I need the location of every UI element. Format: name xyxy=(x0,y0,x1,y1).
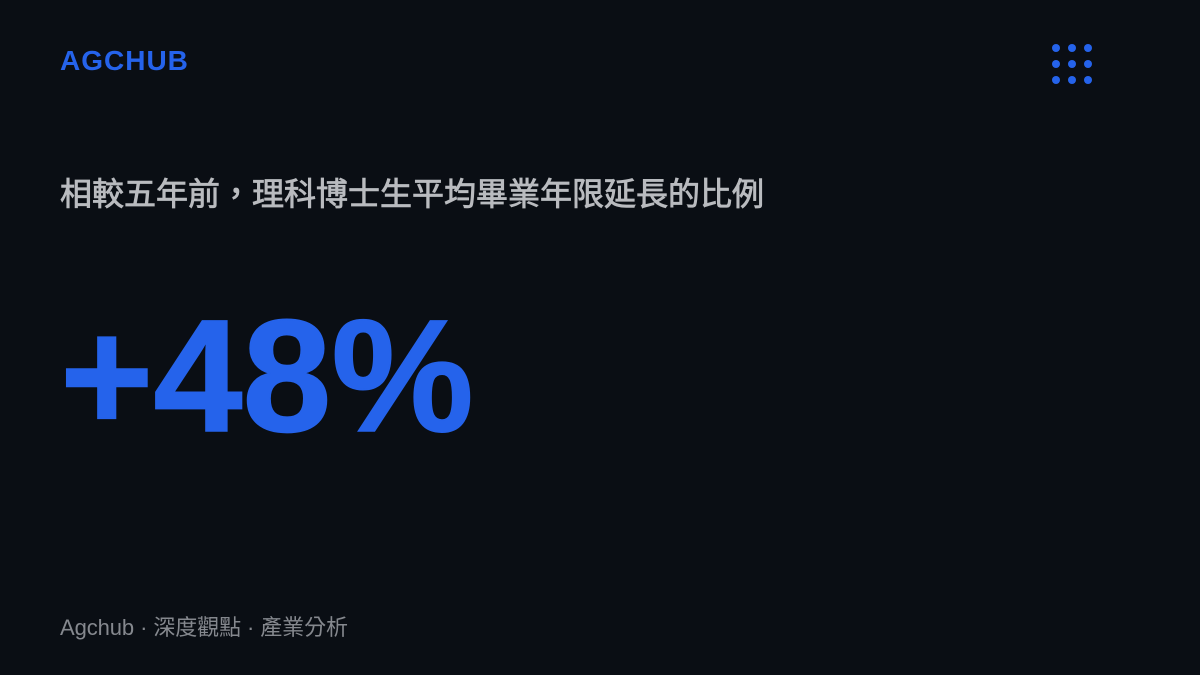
icon: dot grid xyxy=(1052,44,1092,84)
big number: +48%: +48% xyxy=(60,286,474,465)
footer text: Agchub · 深度觀點 · 產業分析 xyxy=(60,615,348,640)
logo: AGCHUB: AGCHUB xyxy=(60,45,189,76)
heading: question text: 相較五年前，理科博士生平均畢業年限延長的比例 xyxy=(60,176,764,212)
